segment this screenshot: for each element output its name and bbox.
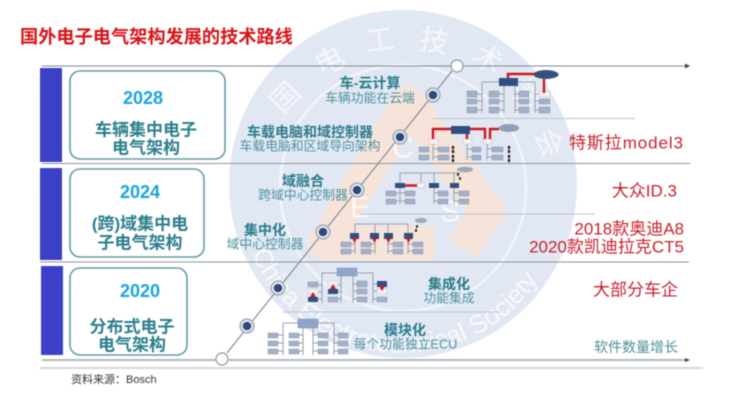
label: domain fusion xyxy=(258,173,348,202)
timeline bottom axis with arrow xyxy=(40,358,703,368)
diagram: domain fusion architecture xyxy=(386,167,473,204)
panel: 2028 architecture: 车辆集中电子 xyxy=(95,120,197,140)
panel: 2024 architecture: (跨)域集中电 xyxy=(92,214,188,234)
watermark: society emblem: 工 xyxy=(363,23,397,59)
label: integration: 功能集成 xyxy=(423,290,475,306)
row divider lines xyxy=(40,118,690,312)
label: Audi A8 and Cadillac CT5 xyxy=(529,220,684,256)
label: modular: 每个功能独立ECU xyxy=(354,336,457,352)
label: vehicle computer and domain controller xyxy=(240,124,380,154)
watermark: society emblem: 会 xyxy=(528,123,569,162)
label: vehicle computer and domain controller: 车载电脑和域控制器 xyxy=(247,124,373,140)
label: domain fusion: 域融合 xyxy=(282,173,324,189)
watermark: society emblem: 国 xyxy=(264,76,308,120)
label: integration: 集成化 xyxy=(428,276,470,292)
label: centralization: 域中心控制器 xyxy=(227,236,304,252)
label: Audi A8 and Cadillac CT5: 2020款凯迪拉克CT5 xyxy=(529,238,684,256)
panel: 2024 architecture xyxy=(40,168,204,260)
source note: 资料来源：Bosch xyxy=(71,372,157,386)
watermark: society emblem: China Electrotechnical Society xyxy=(254,250,538,353)
panel: 2020 architecture xyxy=(41,266,187,355)
label: most automakers: 大部分车企 xyxy=(593,280,678,300)
panel: 2028 architecture xyxy=(40,68,225,162)
panel: 2028 architecture: 2028 xyxy=(123,88,163,108)
watermark: society emblem: 学 xyxy=(503,73,547,116)
watermark: society emblem: E xyxy=(350,192,370,224)
title: 国外电子电气架构发展的技术路线 xyxy=(20,26,293,47)
label: integration xyxy=(423,276,475,306)
label: centralization xyxy=(227,222,304,252)
label: vehicle-cloud computing xyxy=(325,75,415,106)
label: modular xyxy=(354,322,457,352)
diagram: vehicle computer and zone architecture xyxy=(419,124,519,161)
panel: 2024 architecture: 子电气架构 xyxy=(98,234,182,252)
label: vehicle-cloud computing: 车-云计算 xyxy=(340,75,400,91)
label: Volkswagen ID.3: 大众ID.3 xyxy=(612,182,677,200)
label: modular: 模块化 xyxy=(384,322,426,338)
panel: 2020 architecture: 电气架构 xyxy=(98,336,166,354)
timeline top axis with arrow xyxy=(42,64,690,68)
watermark: society emblem: S xyxy=(440,196,460,228)
panel: 2024 architecture: 2024 xyxy=(120,182,160,202)
label: domain fusion: 跨域中心控制器 xyxy=(258,188,348,202)
label: vehicle-cloud computing: 车辆功能在云端 xyxy=(325,90,415,106)
diagram: centralized domain architecture xyxy=(341,218,427,254)
label: software growth: 软件数量增长 xyxy=(594,339,678,355)
watermark: society emblem: C xyxy=(392,132,414,164)
diagram: vehicle-cloud architecture xyxy=(467,70,558,113)
panel: 2028 architecture: 电气架构 xyxy=(112,138,180,158)
panel: 2020 architecture: 分布式电子 xyxy=(90,318,174,336)
label: vehicle computer and domain controller: 车载电脑和区域导向架构 xyxy=(240,138,380,154)
diagonal roadmap line with nodes xyxy=(216,60,463,365)
watermark: society emblem xyxy=(228,10,578,358)
label: Audi A8 and Cadillac CT5: 2018款奥迪A8 xyxy=(574,220,684,238)
watermark: society emblem: 技 xyxy=(417,23,451,60)
panel: 2020 architecture: 2020 xyxy=(120,281,160,301)
diagram: modular ECU architecture xyxy=(268,319,348,355)
watermark: society emblem: 术 xyxy=(466,38,508,81)
diagram: integrated functions architecture xyxy=(308,268,387,303)
label: Tesla Model 3: 特斯拉model3 xyxy=(569,134,683,152)
watermark: society emblem: 电 xyxy=(310,40,350,83)
label: centralization: 集中化 xyxy=(244,222,286,238)
